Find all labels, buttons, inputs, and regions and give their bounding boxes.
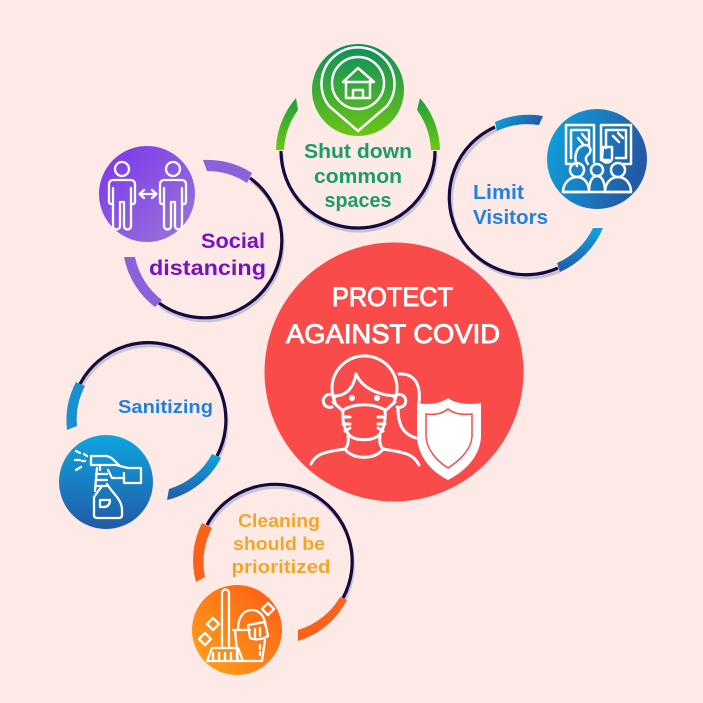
icon: spray bottle [59,435,153,529]
ring: purple [124,160,283,321]
label: limit visitors [473,182,548,229]
label: limit visitors: Visitors [473,207,548,229]
icon: woman wearing mask [311,356,419,465]
main red circle [264,242,524,502]
panel: protect against covid [264,242,524,502]
title: PROTECT [332,282,453,312]
label: shut down common spaces: spaces [324,190,392,212]
ring: blue [449,115,603,278]
label: cleaning should be prioritized: prioritized [232,557,330,577]
title: AGAINST COVID [286,319,500,349]
label: shut down common spaces: common [314,166,402,188]
label: shut down common spaces [304,141,412,212]
panel: cleaning should be prioritized [192,484,353,675]
label: shut down common spaces: Shut down [304,141,412,163]
label: cleaning should be prioritized: should be [233,534,325,554]
panel: shut down common spaces [276,44,440,231]
label: cleaning should be prioritized [232,511,330,577]
label: social distancing: distancing [149,257,266,280]
label: sanitizing: Sanitizing [118,397,213,417]
panel: limit visitors [449,109,647,278]
icon: house location pin [312,44,404,136]
icon: shield [417,398,481,480]
ring: sanitizing blue [66,343,227,500]
label: social distancing [149,230,266,280]
icon: visitors at windows [547,109,647,209]
label: limit visitors: Limit [473,182,524,204]
title [286,282,500,349]
ring: orange [193,484,353,641]
icon: two people apart [99,146,195,242]
label: social distancing: Social [201,230,265,253]
label: cleaning should be prioritized: Cleaning [238,511,320,531]
icon: broom and bucket [192,585,282,675]
panel: social distancing [99,146,283,321]
ring: green [276,98,440,231]
panel: sanitizing [59,343,227,529]
